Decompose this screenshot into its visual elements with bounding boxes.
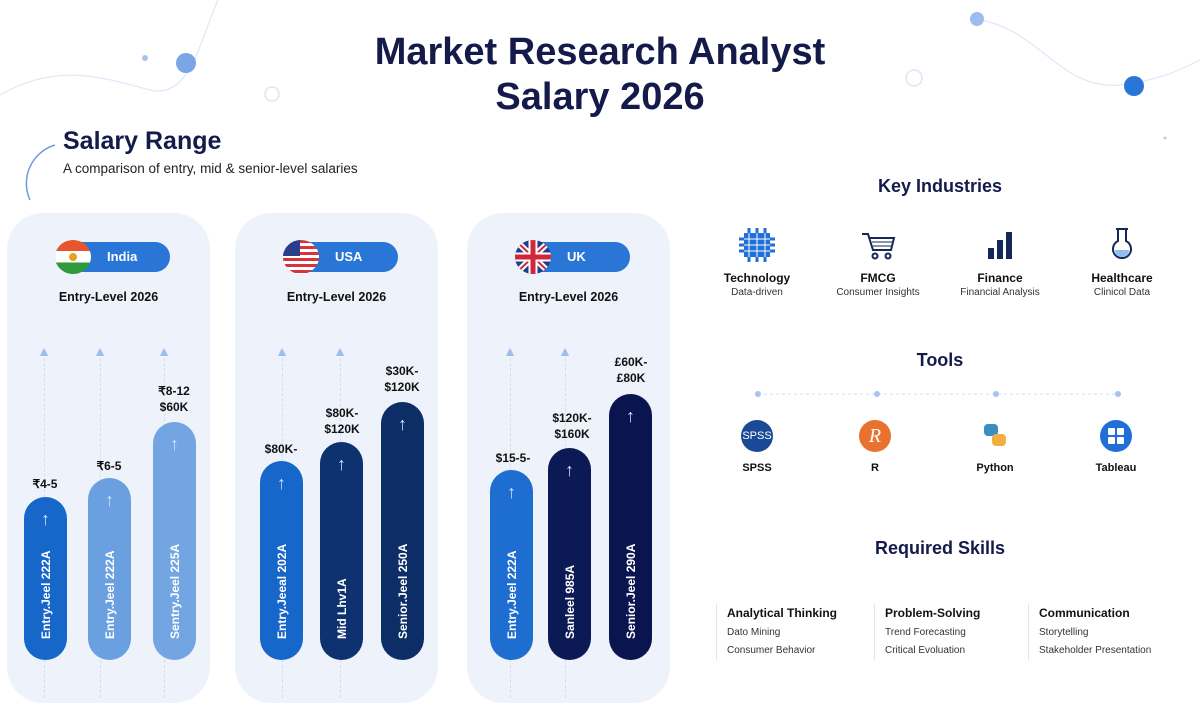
skill: problem solving: Trend Forecasting: [885, 627, 966, 638]
bar: mid: ↑: [105, 490, 114, 510]
panel: UK: $160K: [554, 427, 590, 441]
bar: senior: [381, 402, 424, 660]
icon: technology: Data-driven: [731, 287, 783, 298]
title: Market Research Analyst: [375, 31, 825, 73]
icon: UK flag: [515, 240, 551, 274]
panel: India: ▲: [93, 343, 107, 359]
bar: entry: Entry.Jeeal 202A: [274, 544, 288, 639]
panel: USA: $120K: [324, 422, 360, 436]
icon: India flag: [55, 240, 91, 274]
panel: UK: Entry-Level 2026: [519, 290, 618, 304]
panel: USA: $30K-: [386, 364, 418, 378]
industries row: [724, 228, 1153, 298]
tool: Tableau: Tableau: [1096, 462, 1136, 474]
bar: mid: Entry.Jeel 222A: [102, 550, 116, 639]
tool: SPSS: SPSS: [742, 430, 772, 442]
tool: R: [859, 420, 891, 474]
bar: entry: [24, 497, 67, 660]
panel: USA: ▲: [275, 343, 289, 359]
panel: UK: $15-5-: [496, 451, 530, 465]
tool: Python: Python: [976, 462, 1014, 474]
skill: communication: Storytelling: [1039, 627, 1088, 638]
icon: USA flag: [283, 240, 319, 274]
panel: UK: £60K-: [615, 355, 647, 369]
icon: finance: [960, 232, 1040, 298]
panel: UK: [467, 213, 670, 703]
panel: USA: $120K: [384, 380, 420, 394]
panel: India: India: [107, 249, 137, 264]
skill: communication: Stakeholder Presentation: [1039, 645, 1151, 656]
panel: UK: ▲: [503, 343, 517, 359]
icon: FMCG: Consumer Insights: [836, 287, 920, 298]
bar: entry: ↑: [507, 482, 516, 502]
icon: technology: [724, 228, 790, 298]
bar: entry: [490, 470, 533, 660]
panel: India: $60K: [160, 400, 188, 414]
skill: analytical thinking: Dato Mining: [727, 627, 780, 638]
icon: finance: Finance: [977, 271, 1023, 285]
bar: entry: [260, 461, 303, 660]
bar: senior: Sentry.Jeel 225A: [168, 544, 182, 639]
panel: UK: ▲: [558, 343, 572, 359]
heading: required skills: Required Skills: [875, 538, 1005, 558]
bar: entry: ↑: [277, 473, 286, 493]
icon: technology: Technology: [724, 271, 790, 285]
tool: Python: [976, 424, 1014, 474]
panel: UK: UK: [567, 249, 586, 264]
heading: tools: Tools: [917, 350, 963, 370]
icon: FMCG: FMCG: [860, 271, 896, 285]
bar: entry: Entry.Jeel 222A: [38, 550, 52, 639]
title: [375, 31, 825, 118]
panel: India: ₹8-12: [158, 384, 190, 398]
bar: senior: ↑: [170, 434, 179, 454]
icon: healthcare: Healthcare: [1091, 271, 1153, 285]
panel: UK: $120K-: [552, 411, 592, 425]
bar: entry: Entry.Jeel 222A: [504, 550, 518, 639]
tool: R: R: [871, 462, 879, 474]
panel: India: [7, 213, 210, 703]
bar: mid: ↑: [337, 454, 346, 474]
skill: communication: [1028, 604, 1151, 660]
heading: key industries: Key Industries: [878, 176, 1002, 196]
bar: mid: Sanleel 985A: [562, 565, 576, 639]
icon: healthcare: Clinicol Data: [1094, 287, 1150, 298]
skill: analytical thinking: Analytical Thinking: [727, 606, 837, 620]
panel: USA: ▲: [333, 343, 347, 359]
panel: UK: £80K: [617, 371, 645, 385]
bar: senior: ↑: [398, 414, 407, 434]
skill: problem solving: Critical Evoluation: [885, 645, 965, 656]
title: Salary 2026: [495, 76, 705, 118]
bar: senior: [609, 394, 652, 660]
section heading: salary range: Salary Range: [63, 127, 221, 155]
panel: India: ₹4-5: [32, 477, 57, 491]
panel: India: ₹6-5: [96, 459, 121, 473]
tool: SPSS: [741, 420, 773, 474]
panel: USA: $80K-: [265, 442, 297, 456]
bar: senior: [153, 422, 196, 660]
subtitle: A comparison of entry, mid & senior-level salaries: [63, 161, 358, 176]
icon: FMCG: [836, 233, 920, 298]
bar: senior: Senior.Jeel 250A: [396, 544, 410, 639]
icon: healthcare: [1091, 228, 1153, 298]
icon: finance: Financial Analysis: [960, 287, 1040, 298]
tools timeline line: [755, 391, 1121, 397]
tool: Tableau: [1096, 420, 1136, 474]
panel: India: Entry-Level 2026: [59, 290, 158, 304]
tool: R: R: [869, 425, 881, 447]
skill: problem solving: Problem-Solving: [885, 606, 980, 620]
panel: USA: Entry-Level 2026: [287, 290, 386, 304]
bar: mid: [88, 478, 131, 660]
panel: India: ▲: [37, 343, 51, 359]
bar: mid: ↑: [565, 460, 574, 480]
panel: USA: $80K-: [326, 406, 358, 420]
panel: USA: [235, 213, 438, 703]
panel: USA: USA: [335, 249, 362, 264]
skill: analytical thinking: [716, 604, 837, 660]
tool: SPSS: SPSS: [742, 462, 772, 474]
bar: mid: Mid Lhv1A: [334, 578, 348, 639]
bar: mid: [548, 448, 591, 660]
bar: senior: Senior.Jeel 290A: [624, 544, 638, 639]
bar: mid: [320, 442, 363, 660]
bar: entry: ↑: [41, 509, 50, 529]
skill: analytical thinking: Consumer Behavior: [727, 645, 815, 656]
skill: problem solving: [874, 604, 980, 660]
panel: India: ▲: [157, 343, 171, 359]
skill: communication: Communication: [1039, 606, 1130, 620]
bar: senior: ↑: [626, 406, 635, 426]
